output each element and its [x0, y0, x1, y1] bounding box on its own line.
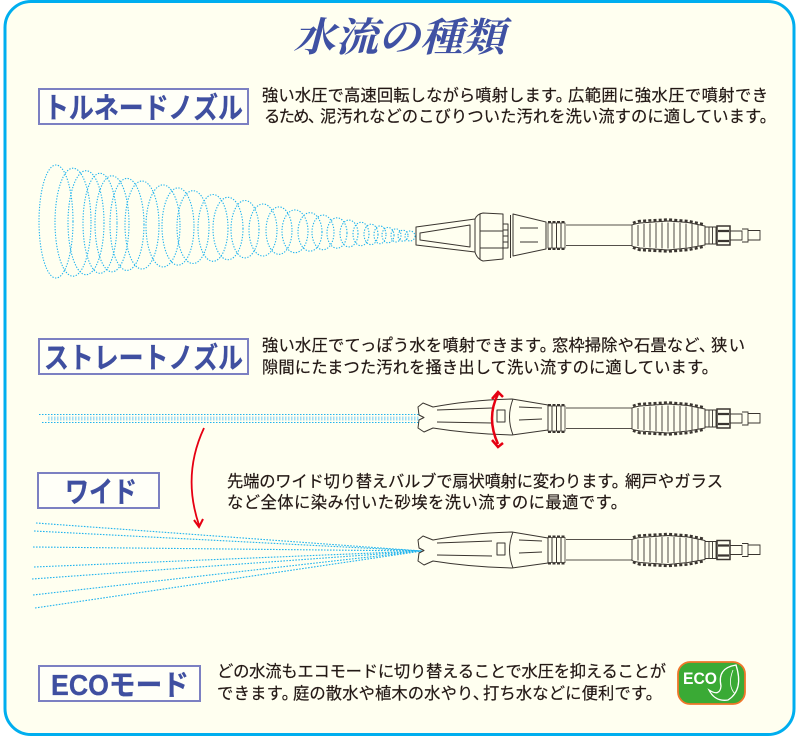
label: ECO mode: ECOモード [51, 670, 189, 702]
section: wide nozzle [32, 472, 760, 608]
description: wide nozzle: 先端のワイド切り替えバルブで扇状噴射に変わります。 [227, 472, 628, 491]
description: tornado nozzle: 泥汚れなどのこびりついた汚れを洗い流すのに適しています。 [320, 108, 776, 126]
description: wide nozzle: 網戸やガラス [625, 473, 723, 491]
label: tornado nozzle: トルネードノズル [44, 91, 243, 125]
nozzle: tornado [416, 213, 760, 261]
description: wide nozzle: など全体に染み付いた砂埃を洗い流すのに最適です。 [227, 494, 627, 512]
icon: ECO badge [678, 662, 745, 704]
transition arrow [192, 428, 204, 527]
description: ECO mode: できます。 [217, 685, 298, 703]
section: ECO mode [39, 662, 745, 704]
description: ECO mode: どの水流もエコモードに切り替えることで水圧を抑えることが [217, 663, 666, 681]
section: tornado nozzle [39, 87, 776, 278]
water spray: spiral jet [39, 165, 415, 278]
description: tornado nozzle: 広範囲に強水圧で噴射でき [568, 87, 768, 105]
label: straight nozzle: ストレートノズル [44, 341, 243, 375]
description: straight nozzle [262, 337, 745, 377]
description: ECO mode [217, 663, 666, 703]
description: ECO mode: 庭の散水や植木の水やり、 [293, 685, 489, 703]
description: tornado nozzle: 強い水圧で高速回転しながら噴射します。 [262, 87, 572, 105]
nozzle: wide [418, 532, 760, 568]
section: straight nozzle [39, 337, 760, 447]
description: straight nozzle: 隙間にたまつた汚れを掻き出して洗い流すのに適しています。 [262, 359, 718, 377]
description: straight nozzle: 窓枠掃除や石畳など、 [552, 337, 715, 355]
label: wide nozzle [38, 473, 159, 509]
label: wide nozzle: ワイド [65, 477, 137, 509]
icon: ECO badge: ECO [683, 669, 717, 688]
icon: rotate double arrow [492, 392, 503, 447]
description: ECO mode: 打ち水などに便利です。 [483, 685, 662, 703]
title: 水流の種類 [293, 15, 512, 60]
description: wide nozzle [227, 472, 723, 512]
water spray: fan jet [32, 523, 422, 608]
description: straight nozzle: 強い水圧でてっぽう水を噴射できます。 [262, 337, 556, 355]
description: tornado nozzle [262, 87, 776, 126]
description: straight nozzle: 狭い [711, 337, 745, 355]
nozzle: straight [418, 399, 760, 435]
description: tornado nozzle: るため、 [264, 108, 324, 126]
water spray: straight jet [39, 414, 420, 422]
